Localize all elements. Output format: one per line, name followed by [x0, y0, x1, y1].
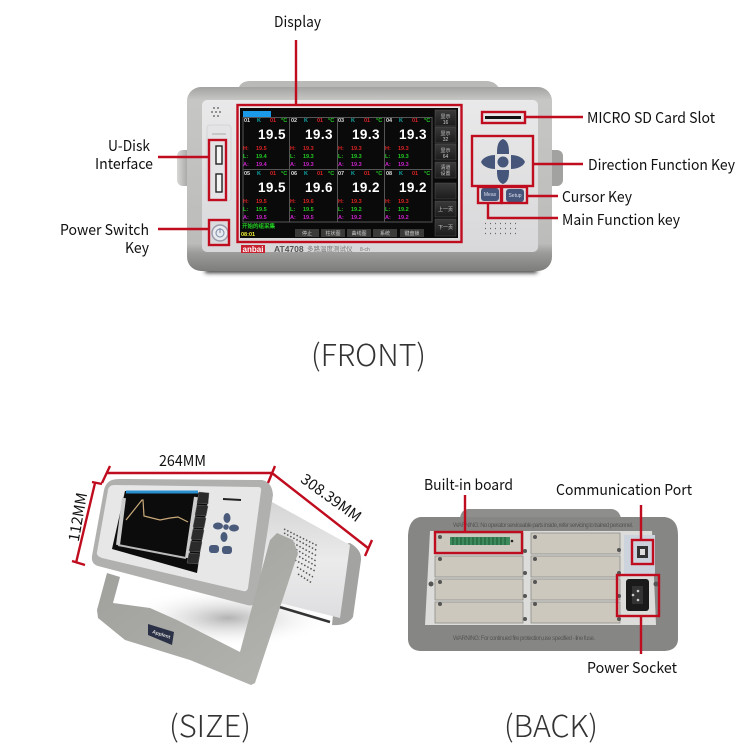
status bar: 曲线图: [351, 230, 367, 237]
rear cap: [332, 543, 361, 625]
model name: 多路温度测试仪: [307, 243, 353, 253]
annotation: dimension lines: [72, 466, 372, 565]
vent holes: [284, 529, 318, 583]
cell readings: L:: [290, 154, 295, 160]
cell readings: A:: [338, 162, 344, 168]
cell readings: 19.3: [352, 127, 380, 142]
side casing: [256, 502, 350, 618]
expansion cards: [435, 533, 620, 623]
label: Communication Port: Communication Port: [556, 479, 692, 500]
status bar: 08:01: [241, 232, 255, 238]
side bottom edge: [256, 600, 330, 622]
handle: [97, 533, 298, 685]
ground shadow: [123, 588, 333, 648]
side softkeys: 显示: [440, 148, 451, 154]
side softkeys: 显示: [440, 114, 451, 120]
cell readings: A:: [385, 215, 391, 221]
curve screen: [112, 491, 209, 573]
status bar: [241, 222, 424, 238]
cell readings: L:: [385, 207, 390, 213]
cell readings: H:: [385, 146, 391, 152]
label: Cursor Key: Cursor Key: [562, 186, 632, 207]
cell readings: K: [304, 118, 308, 124]
cell readings: 19.3: [351, 199, 362, 205]
brand logo: anbai: [243, 245, 263, 254]
label: Power Switch Key: [60, 219, 149, 258]
cell readings: 01: [412, 171, 418, 177]
USB area: [207, 125, 231, 201]
cell readings: 01: [364, 171, 370, 177]
cell readings: A:: [290, 162, 296, 168]
power socket: [626, 579, 649, 611]
cell readings: 04: [386, 118, 393, 124]
cell readings: °C: [281, 171, 287, 177]
status bar: 键盘锁: [404, 230, 420, 237]
cell readings: 19.5: [303, 207, 314, 213]
cell readings: 19.5: [256, 215, 267, 221]
cell readings: 01: [244, 118, 250, 124]
status bar: 开始的组采集: [242, 222, 276, 230]
cell readings: 19.3: [398, 146, 409, 152]
status bar: 停止: [302, 230, 312, 237]
cell readings: A:: [243, 215, 249, 221]
heading: FRONT: (FRONT): [311, 331, 426, 375]
device shadow: [205, 268, 537, 273]
handle badge: [148, 624, 174, 645]
SD slot: [223, 499, 241, 500]
cell readings: H:: [290, 146, 296, 152]
cell readings: 01: [317, 171, 323, 177]
cell readings: H:: [243, 146, 249, 152]
USB port panel: [624, 535, 655, 576]
cell readings: H:: [338, 146, 344, 152]
handle badge: Applent: [151, 629, 171, 641]
cell readings: °C: [376, 118, 382, 124]
cell readings: 19.3: [303, 154, 314, 160]
side softkeys: 清道: [440, 164, 451, 171]
direction keys: [481, 139, 525, 184]
cell readings: 19.3: [303, 146, 314, 152]
cell readings: 19.2: [399, 180, 427, 195]
cell readings: 19.3: [351, 162, 362, 168]
annotation: red callouts front: [158, 40, 583, 245]
speaker grille left: [211, 107, 221, 117]
cell readings: K: [351, 118, 355, 124]
cell readings: 19.3: [398, 162, 409, 168]
cell readings: 19.5: [303, 215, 314, 221]
terminal block: [450, 537, 513, 545]
cell readings: 19.2: [398, 215, 409, 221]
cell readings: 07: [338, 171, 344, 177]
cell readings: L:: [385, 154, 390, 160]
model name: 8-ch: [360, 247, 370, 253]
cell readings: 19.2: [398, 207, 409, 213]
softkeys: [187, 492, 209, 564]
cell readings: 08: [386, 171, 392, 177]
label: U-Disk Interface: U-Disk: [108, 135, 151, 156]
side softkeys: 16: [443, 120, 448, 126]
cell readings: °C: [328, 171, 334, 177]
cell readings: 19.4: [256, 162, 268, 168]
rear handle: [460, 509, 621, 518]
side softkeys: 64: [443, 154, 448, 160]
cell readings: 01: [412, 118, 418, 124]
cell readings: °C: [376, 171, 382, 177]
cell readings: 03: [338, 118, 344, 124]
label: Display: Display: [274, 11, 321, 32]
speaker grille right: [485, 224, 520, 234]
model name: [274, 243, 370, 254]
cell readings: 19.3: [303, 162, 314, 168]
cell readings: K: [304, 171, 308, 177]
heading: SIZE: (SIZE): [169, 702, 251, 746]
label: 264MM: 264MM: [159, 450, 206, 471]
cell readings: K: [351, 171, 355, 177]
cell readings: 02: [291, 118, 297, 124]
cell readings: H:: [338, 199, 344, 205]
cell readings: H:: [243, 199, 249, 205]
cell readings: 19.5: [256, 146, 267, 152]
cell readings: A:: [290, 215, 296, 221]
cell readings: L:: [243, 154, 248, 160]
cell readings: K: [399, 171, 403, 177]
cell readings: H:: [290, 199, 296, 205]
side softkeys: 设置: [440, 170, 451, 177]
cell readings: 19.6: [303, 199, 314, 205]
warning text bottom: WARNING: For continued fire protection,use specified - line fuse.: [453, 636, 595, 642]
label: U-Disk Interface: [95, 135, 153, 174]
cell readings: K: [257, 118, 261, 124]
warning text top: WARNING: No operator serviceable parts inside, refer servicing to trained personnel.: [453, 523, 633, 529]
side softkeys: 下一页: [438, 225, 453, 231]
cell readings: K: [257, 171, 261, 177]
power button: [212, 225, 228, 241]
cell readings: °C: [424, 171, 430, 177]
cell readings: L:: [338, 154, 343, 160]
cell readings: [243, 118, 430, 221]
cell readings: L:: [290, 207, 295, 213]
Mess key: [481, 188, 499, 201]
cell readings: 19.5: [256, 207, 267, 213]
cell readings: 19.3: [398, 154, 409, 160]
Mess key: Meas: [484, 192, 497, 198]
side softkeys: 32: [443, 137, 448, 143]
side knobs: [177, 150, 563, 186]
cell readings: 01: [364, 118, 370, 124]
cell readings: 19.5: [258, 180, 286, 195]
rear panel: [425, 531, 656, 625]
rear body: [408, 517, 678, 651]
label: MICRO SD Card Slot: MICRO SD Card Slot: [587, 107, 715, 128]
label: 308.39MM: 308.39MM: [297, 468, 366, 527]
heading: BACK: (BACK): [504, 702, 598, 746]
cell readings: L:: [338, 207, 343, 213]
cell readings: 19.3: [399, 127, 427, 142]
screws: [428, 535, 658, 621]
device body: [187, 87, 552, 271]
cell readings: 05: [244, 171, 250, 177]
label: U-Disk Interface: Interface: [95, 153, 153, 174]
Setup key: Setup: [508, 193, 522, 199]
annotation: red callouts back: [435, 495, 659, 654]
panel: back view device: [408, 509, 678, 651]
Setup key: [506, 189, 524, 202]
side softkeys: 显示: [440, 131, 451, 137]
cell readings: A:: [243, 162, 249, 168]
cell readings: 01: [270, 171, 276, 177]
cell readings: 01: [317, 118, 323, 124]
cell readings: A:: [385, 162, 391, 168]
cell readings: 19.4: [256, 154, 268, 160]
cell readings: 19.5: [256, 199, 267, 205]
cell readings: 19.3: [351, 146, 362, 152]
direction pad: [209, 513, 239, 554]
cell readings: H:: [385, 199, 391, 205]
label: Direction Function Key: Direction Function Key: [588, 154, 735, 175]
label: Built-in board: Built-in board: [424, 474, 513, 495]
front panel: [97, 485, 261, 591]
cell readings: 19.2: [352, 180, 380, 195]
side softkeys: 上一页: [438, 206, 453, 213]
cell readings: 19.3: [351, 154, 362, 160]
label: Power Switch Key: Key: [125, 237, 149, 258]
cell readings: °C: [328, 118, 334, 124]
panel: front view device: [177, 81, 563, 273]
cell readings: °C: [281, 118, 287, 124]
front panel: [202, 100, 538, 252]
label: 112MM: 112MM: [63, 491, 92, 543]
cell readings: 19.3: [398, 199, 409, 205]
panel: size view device: [92, 479, 361, 685]
cell readings: 19.3: [305, 127, 333, 142]
cell readings: °C: [424, 118, 430, 124]
label: Power Switch Key: Power Switch: [60, 219, 149, 240]
label: Main Function key: Main Function key: [562, 209, 680, 230]
cell readings: 19.6: [305, 180, 333, 195]
cell readings: 06: [291, 171, 297, 177]
front bezel: [92, 479, 273, 605]
status bar: 系统: [380, 230, 390, 237]
model name: AT4708: [274, 244, 304, 254]
cell readings: 19.2: [351, 215, 362, 221]
SD slot: [485, 116, 521, 119]
label: Power Socket: Power Socket: [587, 657, 677, 678]
side softkeys: [435, 110, 456, 236]
cell readings: 19.5: [258, 127, 286, 142]
cell readings: 01: [270, 118, 276, 124]
cell readings: 19.2: [351, 207, 362, 213]
status bar: 柱状图: [325, 230, 341, 237]
cell readings: K: [399, 118, 403, 124]
screen: [240, 108, 458, 238]
device handle: [238, 81, 500, 90]
cell readings: L:: [243, 207, 248, 213]
cell readings: A:: [338, 215, 344, 221]
